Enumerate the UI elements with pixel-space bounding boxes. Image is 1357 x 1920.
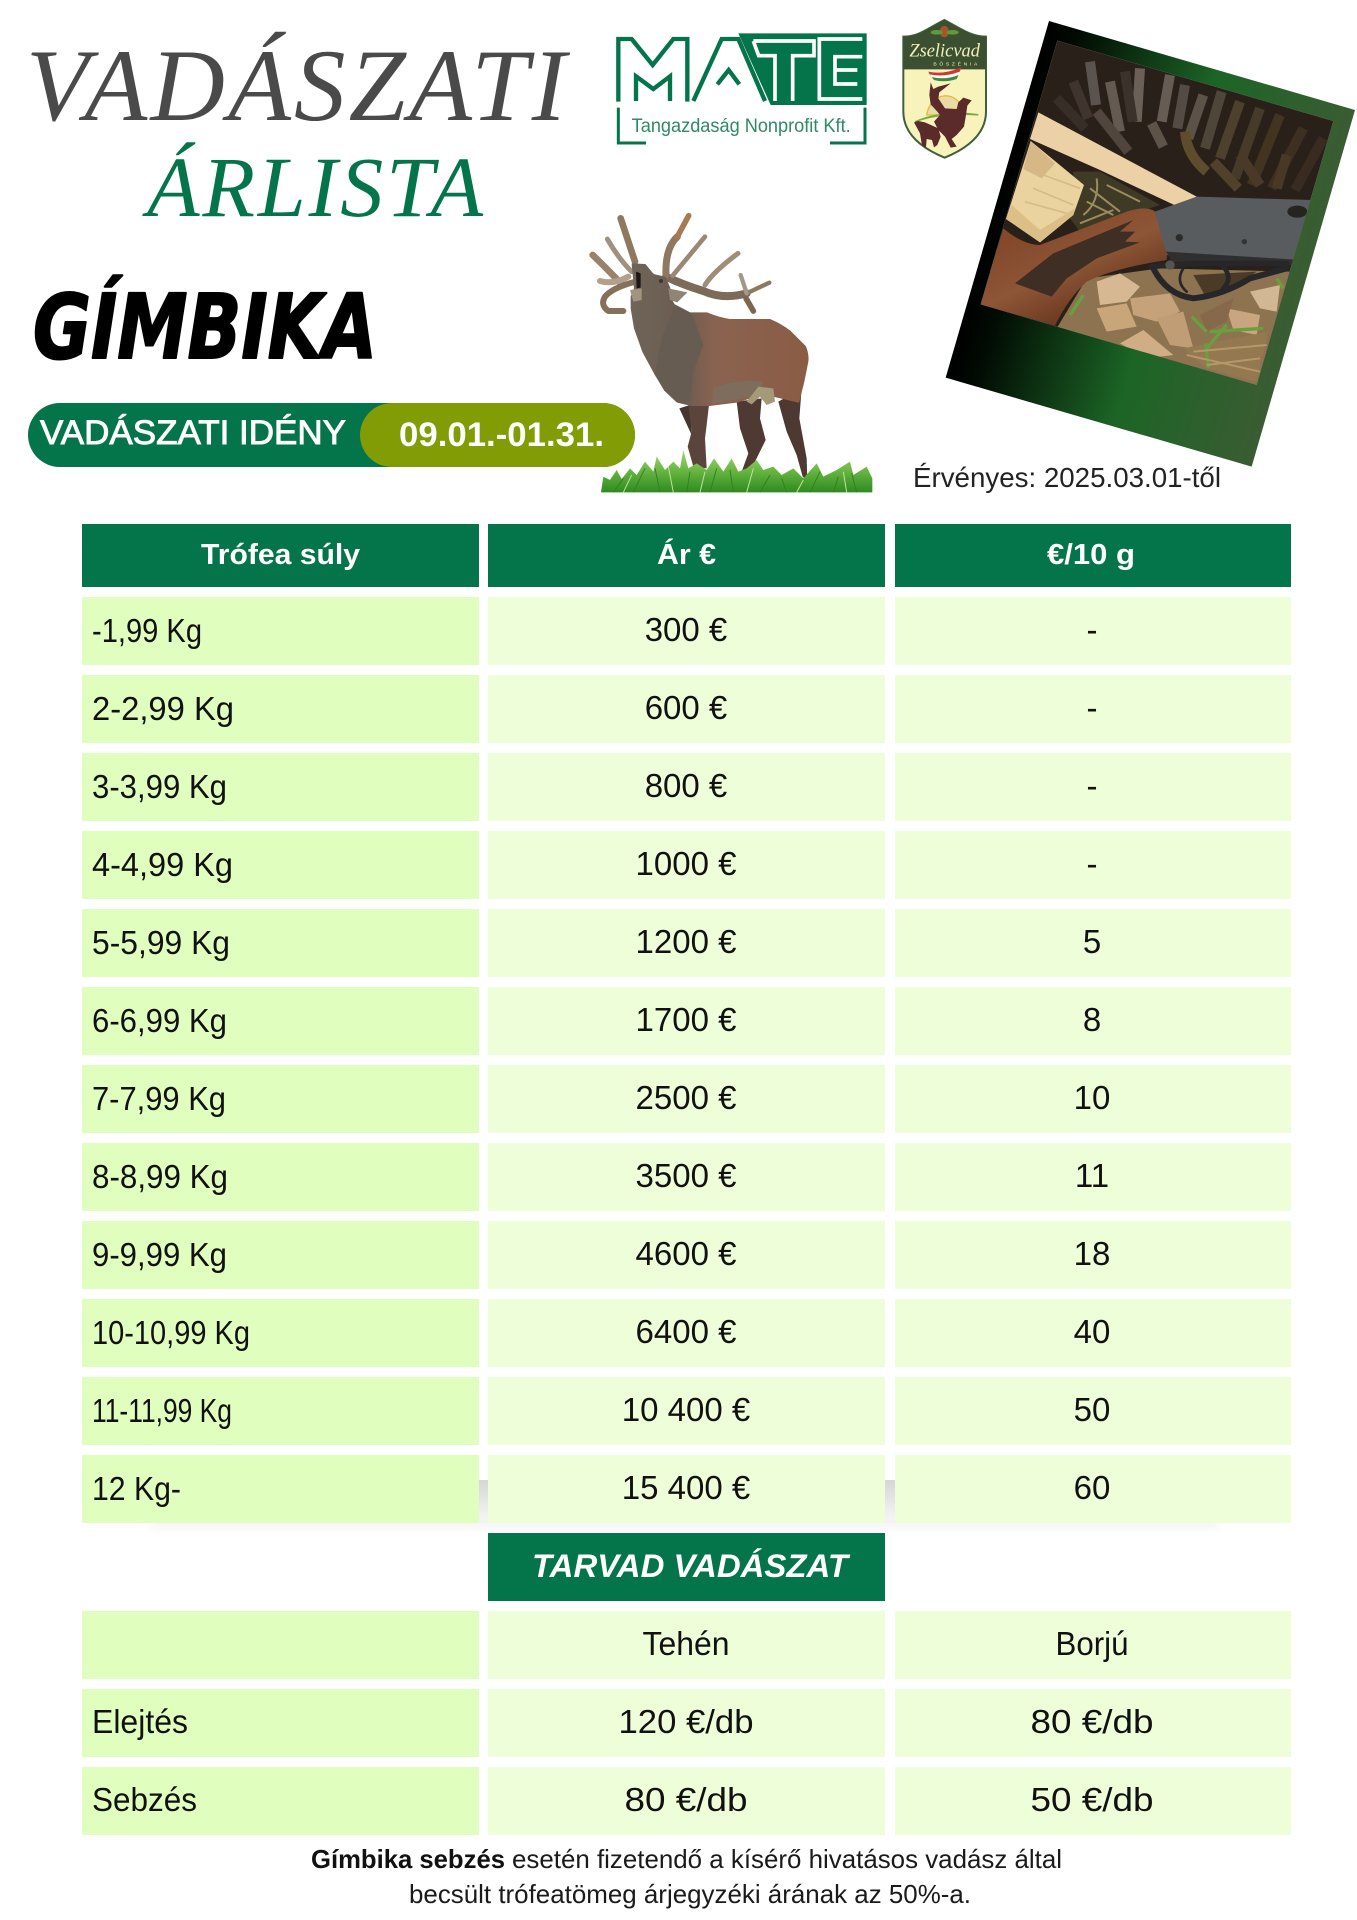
tarvad table: 50 €/db: [1030, 1781, 1154, 1818]
tarvad table: 80 €/db: [1030, 1703, 1154, 1740]
price table rows: 18: [1074, 1235, 1110, 1272]
heading: Tarvad vadászat: TARVAD VADÁSZAT: [532, 1548, 851, 1584]
footnote: [311, 1844, 1062, 1909]
price table rows: 10-10,99 Kg: [92, 1314, 250, 1351]
price table header: Trófea súly: [201, 539, 360, 571]
footnote: Gímbika sebzés: [311, 1844, 505, 1874]
grass: [601, 450, 872, 492]
tarvad table: 120 €/db: [618, 1703, 754, 1740]
price table rows: 600 €: [645, 689, 727, 726]
price table rows: -: [1086, 845, 1098, 882]
price table rows: [82, 597, 1291, 1523]
turkey feathers: [1057, 62, 1323, 190]
logo: MATE Tangazdaság: Tangazdaság Nonprofit Kft.: [632, 116, 851, 137]
price table header: Ár €: [657, 537, 716, 571]
rifle stock: [980, 208, 1167, 326]
price table rows: 15 400 €: [622, 1469, 750, 1506]
price table rows: 6400 €: [636, 1313, 736, 1350]
price table rows: 1700 €: [636, 1001, 736, 1038]
receiver: [1155, 197, 1312, 262]
price table rows: 3-3,99 Kg: [92, 768, 227, 805]
price table rows: 10: [1074, 1079, 1110, 1116]
price table rows: 9-9,99 Kg: [92, 1236, 227, 1273]
tarvad table: Tehén: [642, 1625, 730, 1662]
price table rows: 8: [1083, 1001, 1101, 1038]
price table rows: 2500 €: [636, 1079, 736, 1116]
tarvad table: Borjú: [1056, 1625, 1128, 1662]
price table rows: 50: [1074, 1391, 1110, 1428]
price table rows: 300 €: [645, 611, 727, 648]
price table rows: 1200 €: [636, 923, 736, 960]
subtitle: Árlista: ÁRLISTA: [142, 139, 483, 235]
price table rows: 11: [1075, 1157, 1109, 1194]
price table rows: 7-7,99 Kg: [92, 1080, 226, 1117]
price table rows: -1,99 Kg: [92, 612, 202, 649]
illustration: red stag on grass: [593, 216, 808, 481]
heading: Gímbika: GÍMBIKA: [33, 275, 377, 379]
logo: MATE Tangazdaság: [618, 33, 867, 143]
price table rows: 8-8,99 Kg: [92, 1158, 228, 1195]
price table rows: 12 Kg-: [92, 1470, 181, 1507]
plank: [1030, 112, 1197, 212]
groin patch: [747, 387, 775, 405]
leaf litter: [1057, 268, 1290, 387]
photo frame: rifle and turkey: [946, 21, 1355, 467]
trigger guard: [1152, 263, 1287, 298]
price table rows: 5-5,99 Kg: [92, 924, 230, 961]
dry grass behind stock: [1070, 172, 1160, 232]
price table rows: -: [1086, 611, 1098, 648]
price table rows: -: [1086, 689, 1098, 726]
price table rows: 1000 €: [636, 845, 736, 882]
price table header: [82, 524, 1291, 587]
logo: Zselicvad badge: [903, 20, 986, 158]
legs: [737, 398, 766, 477]
body: [632, 264, 808, 405]
price table rows: 800 €: [645, 767, 727, 804]
price table rows: 6-6,99 Kg: [92, 1002, 227, 1039]
price table rows: 4600 €: [636, 1235, 736, 1272]
price table rows: 4-4,99 Kg: [92, 846, 233, 883]
price table rows: 40: [1074, 1313, 1110, 1350]
footnote: esetén fizetendő a kísérő hivatásos vadász által: [512, 1844, 1062, 1874]
heading: Tarvad vadászat: [488, 1533, 885, 1601]
tarvad table: 80 €/db: [624, 1781, 748, 1818]
price table rows: 60: [1074, 1469, 1110, 1506]
head details: [668, 288, 687, 302]
antlers: [593, 216, 769, 311]
season pill: VADÁSZATI IDÉNY: [40, 414, 346, 452]
last row drop shadow: [150, 1480, 1220, 1527]
price table rows: 10 400 €: [622, 1391, 750, 1428]
tarvad table: [82, 1611, 1291, 1835]
season pill: [28, 403, 635, 467]
price table rows: 3500 €: [636, 1157, 736, 1194]
checkering: [1015, 220, 1140, 297]
wood block: [1006, 141, 1084, 242]
logo: Zselicvad badge: BÖSZÉNIA: [933, 60, 978, 67]
price table rows: 11-11,99 Kg: [92, 1392, 232, 1429]
validity date: Érvényes: 2025.03.01-től: [913, 462, 1221, 493]
season pill: 09.01.-01.31.: [399, 416, 604, 454]
tarvad table: Elejtés: [92, 1703, 188, 1740]
price table rows: 5: [1083, 923, 1101, 960]
price table rows: -: [1086, 767, 1098, 804]
price table rows: 2-2,99 Kg: [92, 690, 234, 727]
price table header: €/10 g: [1047, 539, 1135, 571]
title: Vadászati: VADÁSZATI: [26, 29, 571, 143]
footnote: becsült trófeatömeg árjegyzéki árának az 50%-a.: [409, 1879, 971, 1909]
tarvad table: Sebzés: [92, 1781, 197, 1818]
logo: Zselicvad badge: Zselicvad: [909, 41, 981, 62]
